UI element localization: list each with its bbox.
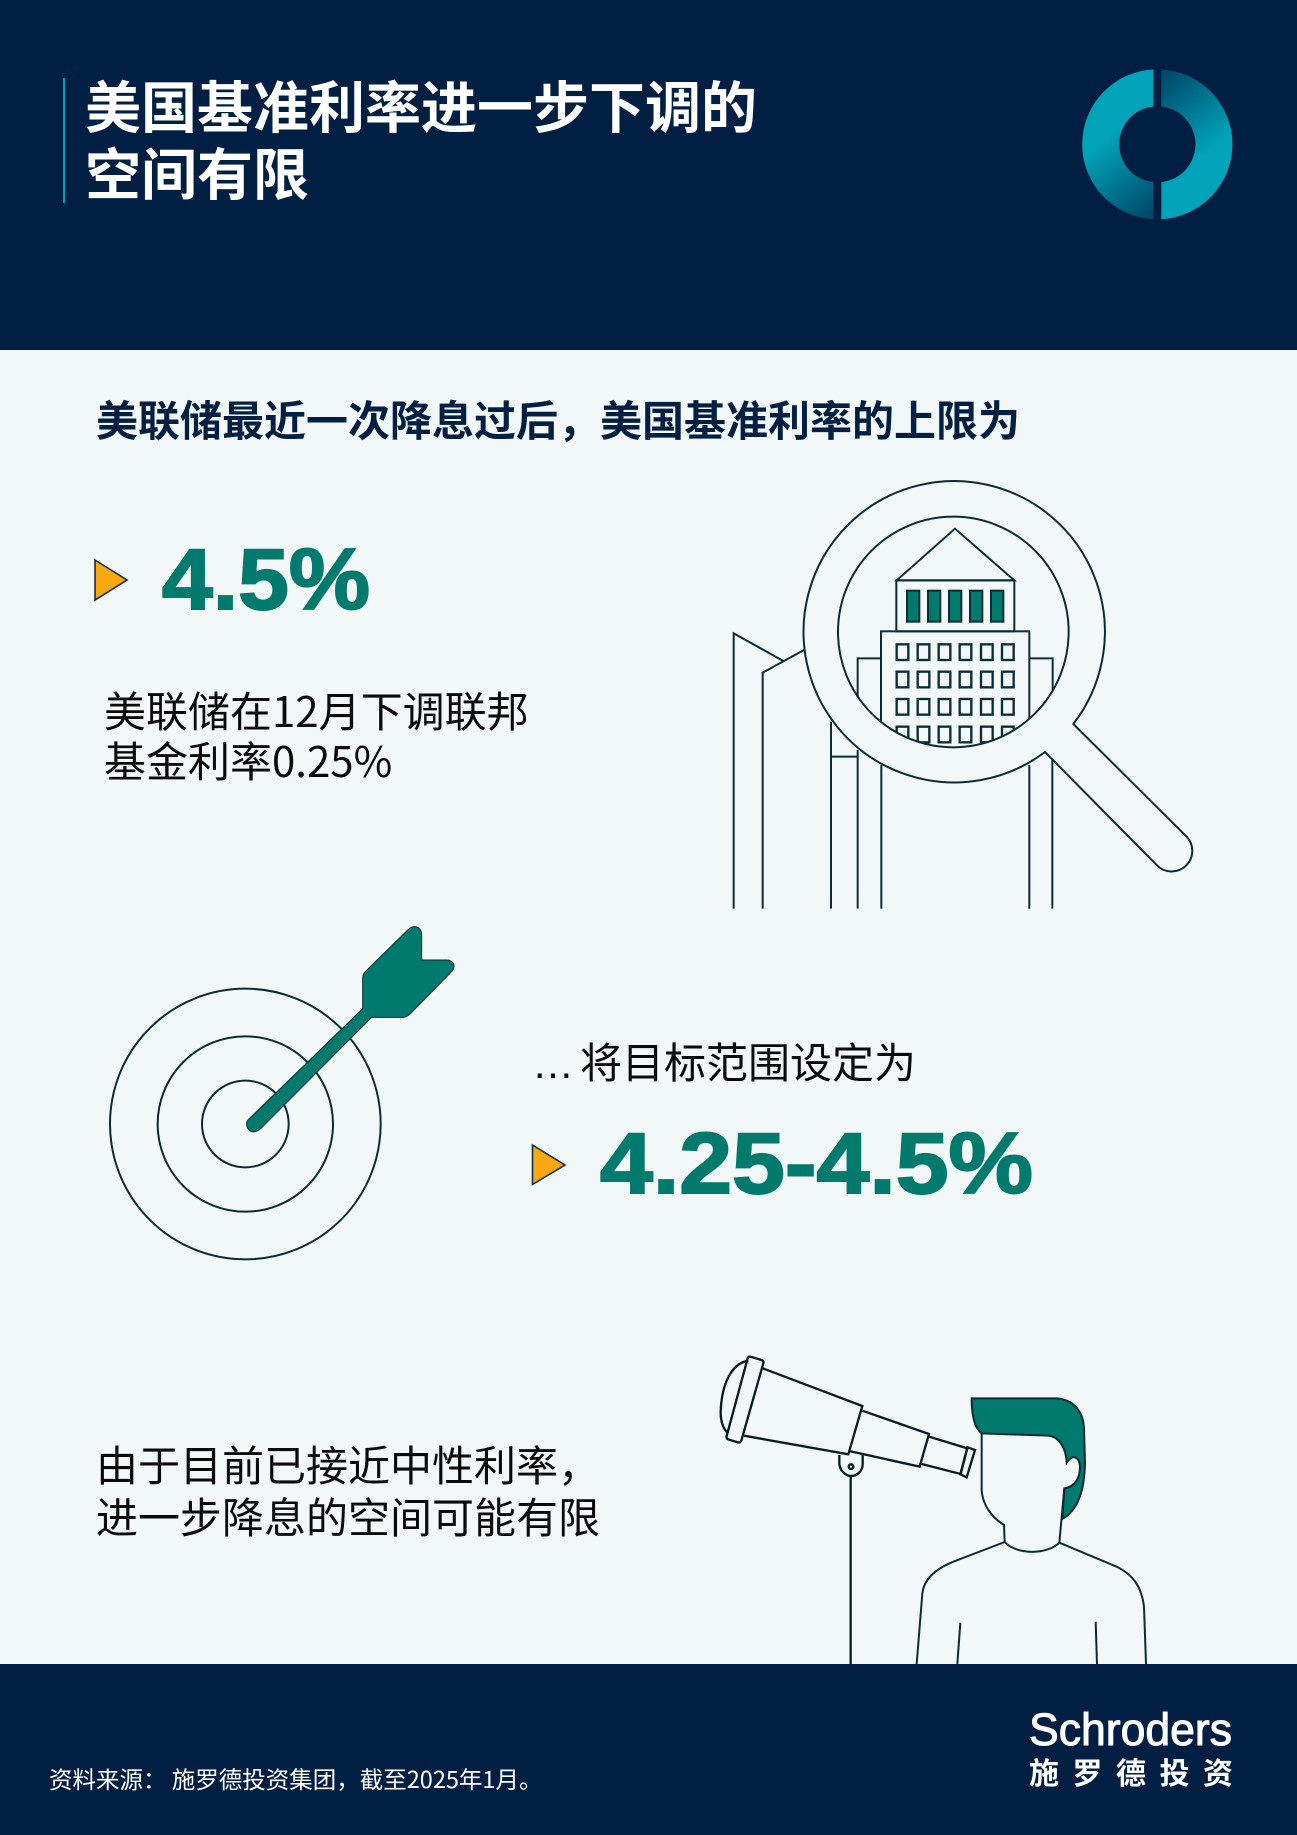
subheading: 美联储最近一次降息过后，美国基准利率的上限为 [96, 388, 1020, 449]
marker: triangle one [94, 558, 128, 602]
brand wordmark: Schroders [1029, 1704, 1232, 1755]
lens ring [838, 517, 1069, 747]
title accent bar [63, 78, 65, 203]
text block: neutral rate [96, 1433, 600, 1546]
text block: December cut [104, 679, 529, 790]
magnifier outline [804, 481, 1192, 871]
building in lens [858, 529, 1053, 765]
icon: Schroders ring logo [1082, 69, 1232, 220]
statistic: 4.25-4.5%: 4.25-4.5% [600, 1116, 1033, 1210]
person [917, 1398, 1146, 1664]
title: 美国基准利率进一步下调的 [85, 64, 757, 145]
title: 空间有限 [85, 131, 309, 212]
marker: triangle two [532, 1144, 566, 1186]
text block: neutral rate: 进一步降息的空间可能有限 [96, 1484, 600, 1546]
footer band [0, 1664, 1297, 1835]
brand Chinese name: 施罗德投资 [1029, 1749, 1246, 1793]
target rings [110, 989, 381, 1259]
header band [0, 0, 1297, 350]
source note: 资料来源： 施罗德投资集团，截至2025年1月。 [49, 1761, 542, 1795]
illustration: person with telescope [720, 1356, 1147, 1664]
text block: neutral rate: 由于目前已接近中性利率， [96, 1433, 600, 1494]
illustration: magnifier over buildings [732, 480, 1194, 909]
text block: December cut: 美联储在12月下调联邦 [104, 679, 529, 740]
title [85, 64, 757, 212]
buildings outside lens [734, 633, 1052, 909]
dart [247, 927, 454, 1132]
telescope [721, 1357, 975, 1664]
text block: December cut: 基金利率0.25% [104, 729, 392, 790]
text block: target lead-in: …将目标范围设定为 [532, 1030, 916, 1091]
illustration: target and dart [109, 926, 454, 1260]
